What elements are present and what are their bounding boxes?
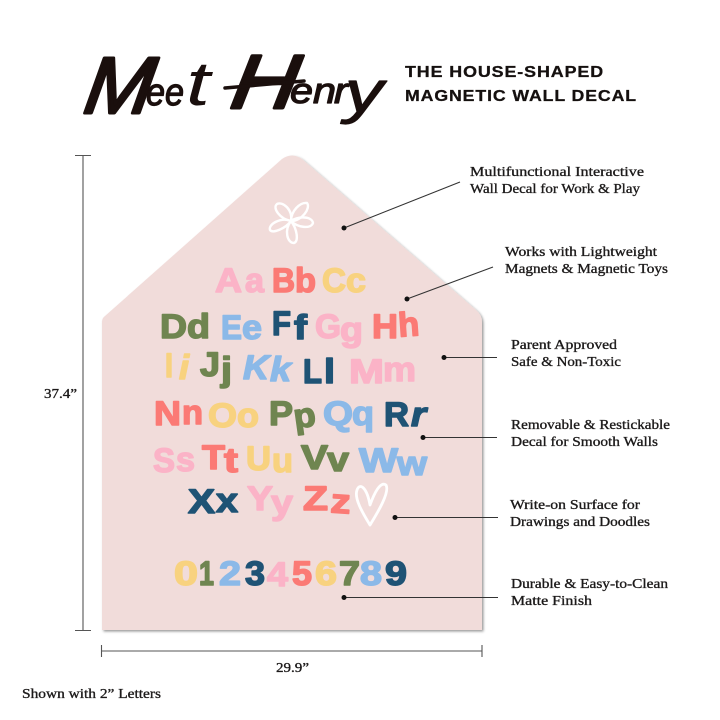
letters row: Dd Ee Ff Gg Hh: e	[242, 309, 262, 347]
numbers row: 9	[385, 555, 407, 593]
letters row: Ss Tt Uu Vv Ww: v	[327, 441, 349, 479]
letters row: Ss Tt Uu Vv Ww: W	[359, 442, 399, 480]
letters row: Nn Oo Pp Qq Rr: n	[182, 394, 203, 432]
letters row: Aa Bb Cc: A	[215, 262, 242, 300]
letters row: Nn Oo Pp Qq Rr	[154, 394, 428, 436]
subtitle: THE HOUSE-SHAPED	[405, 64, 604, 81]
icon: heart doodle	[356, 484, 387, 525]
callout: durable	[342, 577, 668, 609]
letters row: Nn Oo Pp Qq Rr: R	[384, 396, 409, 434]
height dimension	[44, 156, 91, 630]
callout: durable: Durable & Easy-to-Clean	[511, 577, 668, 592]
letters row: Nn Oo Pp Qq Rr: r	[411, 396, 428, 434]
callout: magnets: Works with Lightweight	[505, 245, 657, 260]
title: Meet Henry: t	[186, 50, 214, 119]
letters row: Ss Tt Uu Vv Ww: U	[246, 440, 271, 478]
letters row: Ii Jj Kk Ll Mm: m	[383, 351, 416, 389]
numbers row: 5	[292, 555, 312, 593]
callout: multifunctional: Wall Decal for Work & Play	[470, 182, 640, 197]
letters row: Xx Yy Zz: y	[271, 484, 293, 522]
numbers row: 7	[339, 555, 360, 593]
letters row: Dd Ee Ff Gg Hh: E	[221, 309, 242, 347]
subtitle: MAGNETIC WALL DECAL	[405, 88, 637, 105]
letters row: Ii Jj Kk Ll Mm	[165, 346, 416, 391]
title: Meet Henry: en	[290, 70, 336, 111]
title: Meet Henry: H	[226, 40, 307, 125]
letters row: Nn Oo Pp Qq Rr: Q	[323, 395, 353, 433]
letters row: Ss Tt Uu Vv Ww: T	[202, 439, 225, 477]
title: Meet Henry: M	[79, 41, 162, 131]
letters row: Ii Jj Kk Ll Mm: M	[349, 353, 384, 391]
numbers row: 6	[315, 555, 337, 593]
callout: multifunctional: Multifunctional Interactive	[470, 165, 644, 180]
numbers row: 1	[199, 555, 214, 593]
callout: durable: Matte Finish	[511, 594, 592, 609]
callout: write-on	[392, 498, 650, 530]
numbers row	[174, 555, 407, 594]
title: Meet Henry: y	[340, 60, 387, 125]
footnote: Shown with 2” Letters	[22, 687, 161, 702]
letters row: Ss Tt Uu Vv Ww: S	[153, 442, 175, 480]
letters row: Xx Yy Zz: Y	[247, 480, 273, 518]
letters row: Ss Tt Uu Vv Ww: w	[396, 445, 428, 483]
numbers row: 8	[360, 555, 382, 593]
callout: removable	[420, 418, 670, 450]
title: Meet Henry: r	[334, 70, 350, 111]
letters row: Dd Ee Ff Gg Hh: f	[294, 309, 308, 347]
callout: removable: Decal for Smooth Walls	[511, 435, 658, 450]
letters row: Ii Jj Kk Ll Mm: i	[179, 349, 191, 387]
letters row: Ii Jj Kk Ll Mm: K	[243, 349, 272, 387]
title: Meet Henry: ee	[146, 72, 184, 114]
letters row: Ii Jj Kk Ll Mm: l	[324, 353, 335, 391]
letters row: Nn Oo Pp Qq Rr: o	[237, 397, 259, 435]
numbers row: 2	[219, 555, 241, 593]
letters row: Ss Tt Uu Vv Ww: s	[176, 441, 195, 479]
letters row: Dd Ee Ff Gg Hh: h	[397, 305, 421, 345]
letters row: Dd Ee Ff Gg Hh	[160, 305, 421, 349]
icon: flower doodle	[270, 203, 313, 243]
letters row: Xx Yy Zz: x	[216, 482, 238, 520]
callout: parent approved: Parent Approved	[511, 338, 617, 353]
letters row: Ss Tt Uu Vv Ww	[153, 439, 428, 483]
letters row: Nn Oo Pp Qq Rr: N	[154, 395, 181, 433]
letters row: Ss Tt Uu Vv Ww: u	[272, 442, 293, 480]
numbers row: 0	[174, 555, 198, 593]
letters row: Aa Bb Cc: a	[245, 262, 265, 300]
letters row: Aa Bb Cc: c	[346, 262, 366, 300]
letters row: Ii Jj Kk Ll Mm: I	[165, 347, 173, 385]
callout: write-on: Write-on Surface for	[510, 498, 640, 513]
letters row: Aa Bb Cc	[215, 262, 366, 300]
letters row: Dd Ee Ff Gg Hh: F	[272, 305, 291, 343]
letters row: Ss Tt Uu Vv Ww: t	[224, 442, 238, 480]
letters row: Dd Ee Ff Gg Hh: G	[315, 308, 341, 346]
letters row: Ii Jj Kk Ll Mm: k	[270, 351, 293, 389]
letters row: Ii Jj Kk Ll Mm: L	[303, 353, 322, 391]
callout: multifunctional	[342, 165, 644, 230]
title: Meet Henry	[79, 40, 387, 131]
letters row: Aa Bb Cc: B	[272, 262, 295, 300]
width dimension: 29.9”	[276, 661, 309, 676]
house-shaped decal	[102, 156, 482, 630]
letters row: Aa Bb Cc: b	[295, 262, 316, 300]
letters row: Dd Ee Ff Gg Hh: D	[160, 308, 187, 346]
callout: parent approved	[442, 338, 621, 370]
letters row: Xx Yy Zz	[188, 480, 352, 522]
callout: parent approved: Safe & Non-Toxic	[511, 355, 621, 370]
letters row: Nn Oo Pp Qq Rr: P	[269, 395, 293, 433]
letters row: Ii Jj Kk Ll Mm: j	[220, 351, 232, 389]
height dimension: 37.4”	[44, 387, 77, 402]
numbers row: 3	[245, 555, 265, 593]
letters row: Ii Jj Kk Ll Mm: J	[200, 346, 220, 384]
callout: magnets	[404, 245, 668, 302]
letters row: Dd Ee Ff Gg Hh: d	[187, 308, 210, 346]
numbers row: 4	[267, 556, 288, 594]
letters row: Nn Oo Pp Qq Rr: O	[208, 397, 237, 435]
letters row: Nn Oo Pp Qq Rr: p	[291, 396, 318, 436]
letters row: Xx Yy Zz: X	[188, 483, 215, 521]
letters row: Ss Tt Uu Vv Ww: V	[301, 439, 328, 477]
letters row: Xx Yy Zz: Z	[303, 480, 328, 518]
subtitle	[405, 64, 637, 105]
letters row: Xx Yy Zz: z	[329, 482, 352, 522]
letters row: Aa Bb Cc: C	[322, 262, 346, 300]
callout: magnets: Magnets & Magnetic Toys	[505, 262, 668, 277]
width dimension	[102, 645, 482, 676]
letters row: Nn Oo Pp Qq Rr: q	[352, 395, 374, 433]
callout: removable: Removable & Restickable	[511, 418, 670, 433]
letters row: Dd Ee Ff Gg Hh: g	[340, 311, 363, 349]
callout: write-on: Drawings and Doodles	[510, 515, 650, 530]
letters row: Dd Ee Ff Gg Hh: H	[372, 308, 398, 346]
